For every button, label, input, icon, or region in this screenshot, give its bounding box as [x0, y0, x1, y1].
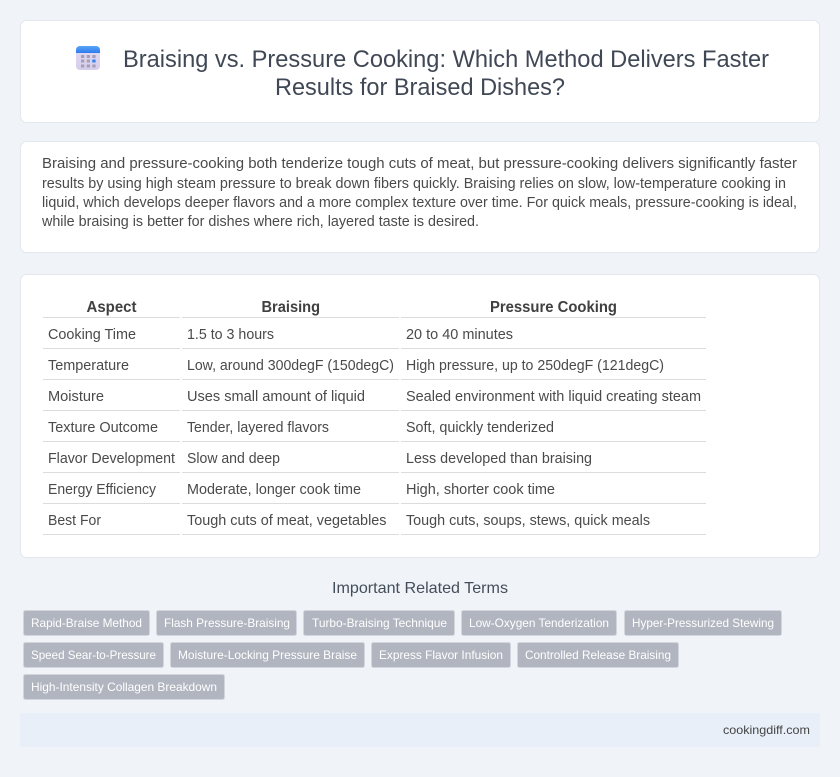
row: temperature: High pressure, up to 250degF (121degC) [406, 358, 664, 374]
row: moisture: Sealed environment with liquid creating steam [406, 389, 701, 405]
footer bar [20, 713, 820, 747]
table header [86, 299, 617, 316]
tag [624, 610, 782, 636]
tag: Hyper-Pressurized Stewing [632, 616, 774, 630]
row: cooking time: 20 to 40 minutes [406, 327, 513, 343]
summary text: while braising is better for dishes where rich, layered taste is desired. [41, 214, 479, 230]
row: moisture [48, 389, 701, 405]
row: temperature: Temperature [48, 358, 129, 374]
row: energy efficiency [48, 482, 555, 498]
tag [24, 610, 150, 636]
row: texture outcome: Soft, quickly tenderized [406, 420, 554, 436]
row: cooking time: Cooking Time [48, 327, 136, 343]
tag [372, 642, 510, 668]
row: best for: Tough cuts, soups, stews, quick meals [406, 513, 650, 529]
tag [304, 610, 454, 636]
summary text: Braising and pressure-cooking both tenderize tough cuts of meat, but pressure-cooking delivers significantly faster [42, 156, 797, 172]
panel: comparison table [20, 274, 820, 558]
row: flavor development: Slow and deep [187, 451, 280, 467]
table header: Pressure Cooking [490, 299, 617, 316]
row: moisture: Moisture [48, 389, 104, 405]
row: flavor development: Flavor Development [48, 451, 175, 467]
tag [462, 610, 616, 636]
tag [170, 642, 364, 668]
row: texture outcome [48, 420, 554, 436]
tag [24, 674, 224, 700]
title: Braising vs. Pressure Cooking: Which Method Delivers Faster [123, 46, 769, 73]
panel: summary [20, 142, 820, 252]
row: cooking time: 1.5 to 3 hours [187, 327, 274, 343]
heading: important related terms: Important Related Terms [332, 580, 508, 597]
row: flavor development: Less developed than braising [406, 451, 592, 467]
icon: calendar [76, 46, 100, 70]
row: energy efficiency: Energy Efficiency [48, 482, 157, 498]
summary text: results by using high steam pressure to break down fibers quickly. Braising relies on slow, low-temperature cooking in [42, 176, 786, 192]
tag [156, 610, 296, 636]
row: best for: Best For [48, 513, 101, 529]
tags: related terms [24, 610, 782, 700]
summary text: liquid, which develops deeper flavors and a more complex texture over time. For quick meals, pressure-cooking is ideal, [42, 195, 797, 211]
table header: Braising [262, 299, 320, 316]
row: texture outcome: Texture Outcome [48, 420, 158, 436]
tag [518, 642, 678, 668]
row: best for: Tough cuts of meat, vegetables [187, 513, 386, 529]
row: cooking time [48, 327, 513, 343]
row: texture outcome: Tender, layered flavors [187, 420, 329, 436]
tag: Flash Pressure-Braising [164, 616, 290, 630]
tag [24, 642, 164, 668]
panel: title header [20, 20, 820, 122]
tag: Express Flavor Infusion [379, 648, 503, 662]
row: best for [48, 513, 650, 529]
footer source: cookingdiff.com [723, 723, 810, 737]
tag: Speed Sear-to-Pressure [31, 648, 156, 662]
tag: High-Intensity Collagen Breakdown [31, 680, 217, 694]
table header: Aspect [86, 299, 137, 316]
tag: Low-Oxygen Tenderization [469, 616, 609, 630]
tag: Turbo-Braising Technique [312, 616, 447, 630]
row: energy efficiency: Moderate, longer cook time [187, 482, 361, 498]
tag: Moisture-Locking Pressure Braise [178, 648, 357, 662]
tag: Controlled Release Braising [525, 648, 671, 662]
row: temperature: Low, around 300degF (150degC) [187, 358, 394, 374]
row: energy efficiency: High, shorter cook time [406, 482, 555, 498]
row: temperature [48, 358, 664, 374]
row: flavor development [48, 451, 592, 467]
row: moisture: Uses small amount of liquid [187, 389, 365, 405]
title: Results for Braised Dishes? [275, 74, 565, 101]
tag: Rapid-Braise Method [31, 616, 142, 630]
